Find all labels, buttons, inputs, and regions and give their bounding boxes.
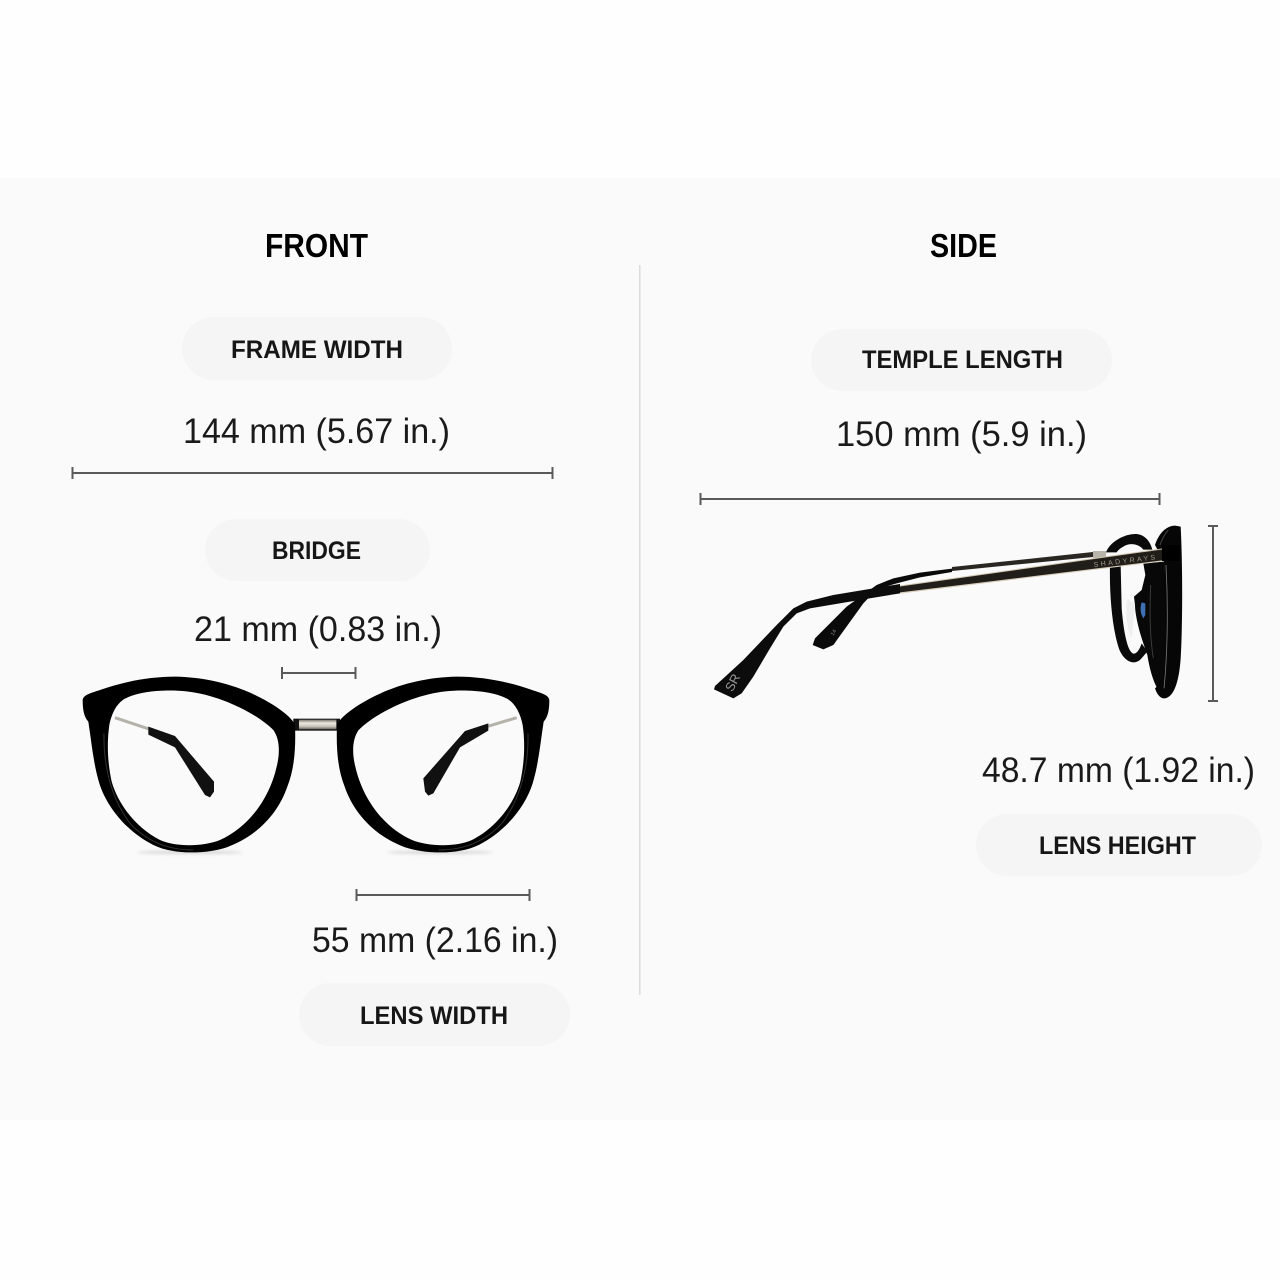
pill: frame width	[182, 317, 452, 380]
pill: lens width	[299, 983, 570, 1046]
frame front, side angle	[1106, 526, 1182, 698]
pill: frame width: FRAME WIDTH	[231, 336, 403, 364]
logo: SR: SR	[723, 672, 743, 694]
brand text on temple: SHADYRAYS	[1093, 554, 1158, 569]
icon: glasses side	[714, 526, 1182, 698]
dimension line: frame width	[72, 467, 552, 479]
near temple	[900, 549, 1162, 593]
value: bridge: 21 mm (0.83 in.)	[194, 610, 442, 649]
logo: 14: 14	[830, 629, 838, 637]
value: lens height: 48.7 mm (1.92 in.)	[982, 751, 1255, 790]
background panel	[0, 178, 1280, 1120]
value: lens width: 55 mm (2.16 in.)	[312, 921, 558, 960]
heading: side: SIDE	[930, 227, 997, 264]
dimension line: lens width	[356, 889, 530, 901]
heading: front: FRONT	[265, 227, 368, 264]
divider	[639, 265, 640, 995]
pill: bridge: BRIDGE	[272, 537, 361, 565]
temple tips	[714, 569, 952, 698]
icon: glasses front	[83, 677, 549, 854]
far temple	[952, 552, 1093, 571]
pill: temple length	[811, 329, 1112, 391]
dimension line: lens height	[1208, 526, 1218, 701]
value: temple length: 150 mm (5.9 in.)	[836, 415, 1087, 454]
dimension line: bridge	[282, 667, 356, 679]
dimension line: temple length	[700, 493, 1160, 505]
pill: lens height: LENS HEIGHT	[1039, 832, 1196, 860]
pill: lens width: LENS WIDTH	[360, 1002, 508, 1030]
panel: side view	[700, 227, 1262, 876]
pill: temple length: TEMPLE LENGTH	[862, 346, 1063, 374]
value: frame width: 144 mm (5.67 in.)	[183, 412, 450, 451]
pill: bridge	[205, 519, 430, 581]
panel: front view	[72, 227, 570, 1046]
pill: lens height	[976, 814, 1262, 876]
